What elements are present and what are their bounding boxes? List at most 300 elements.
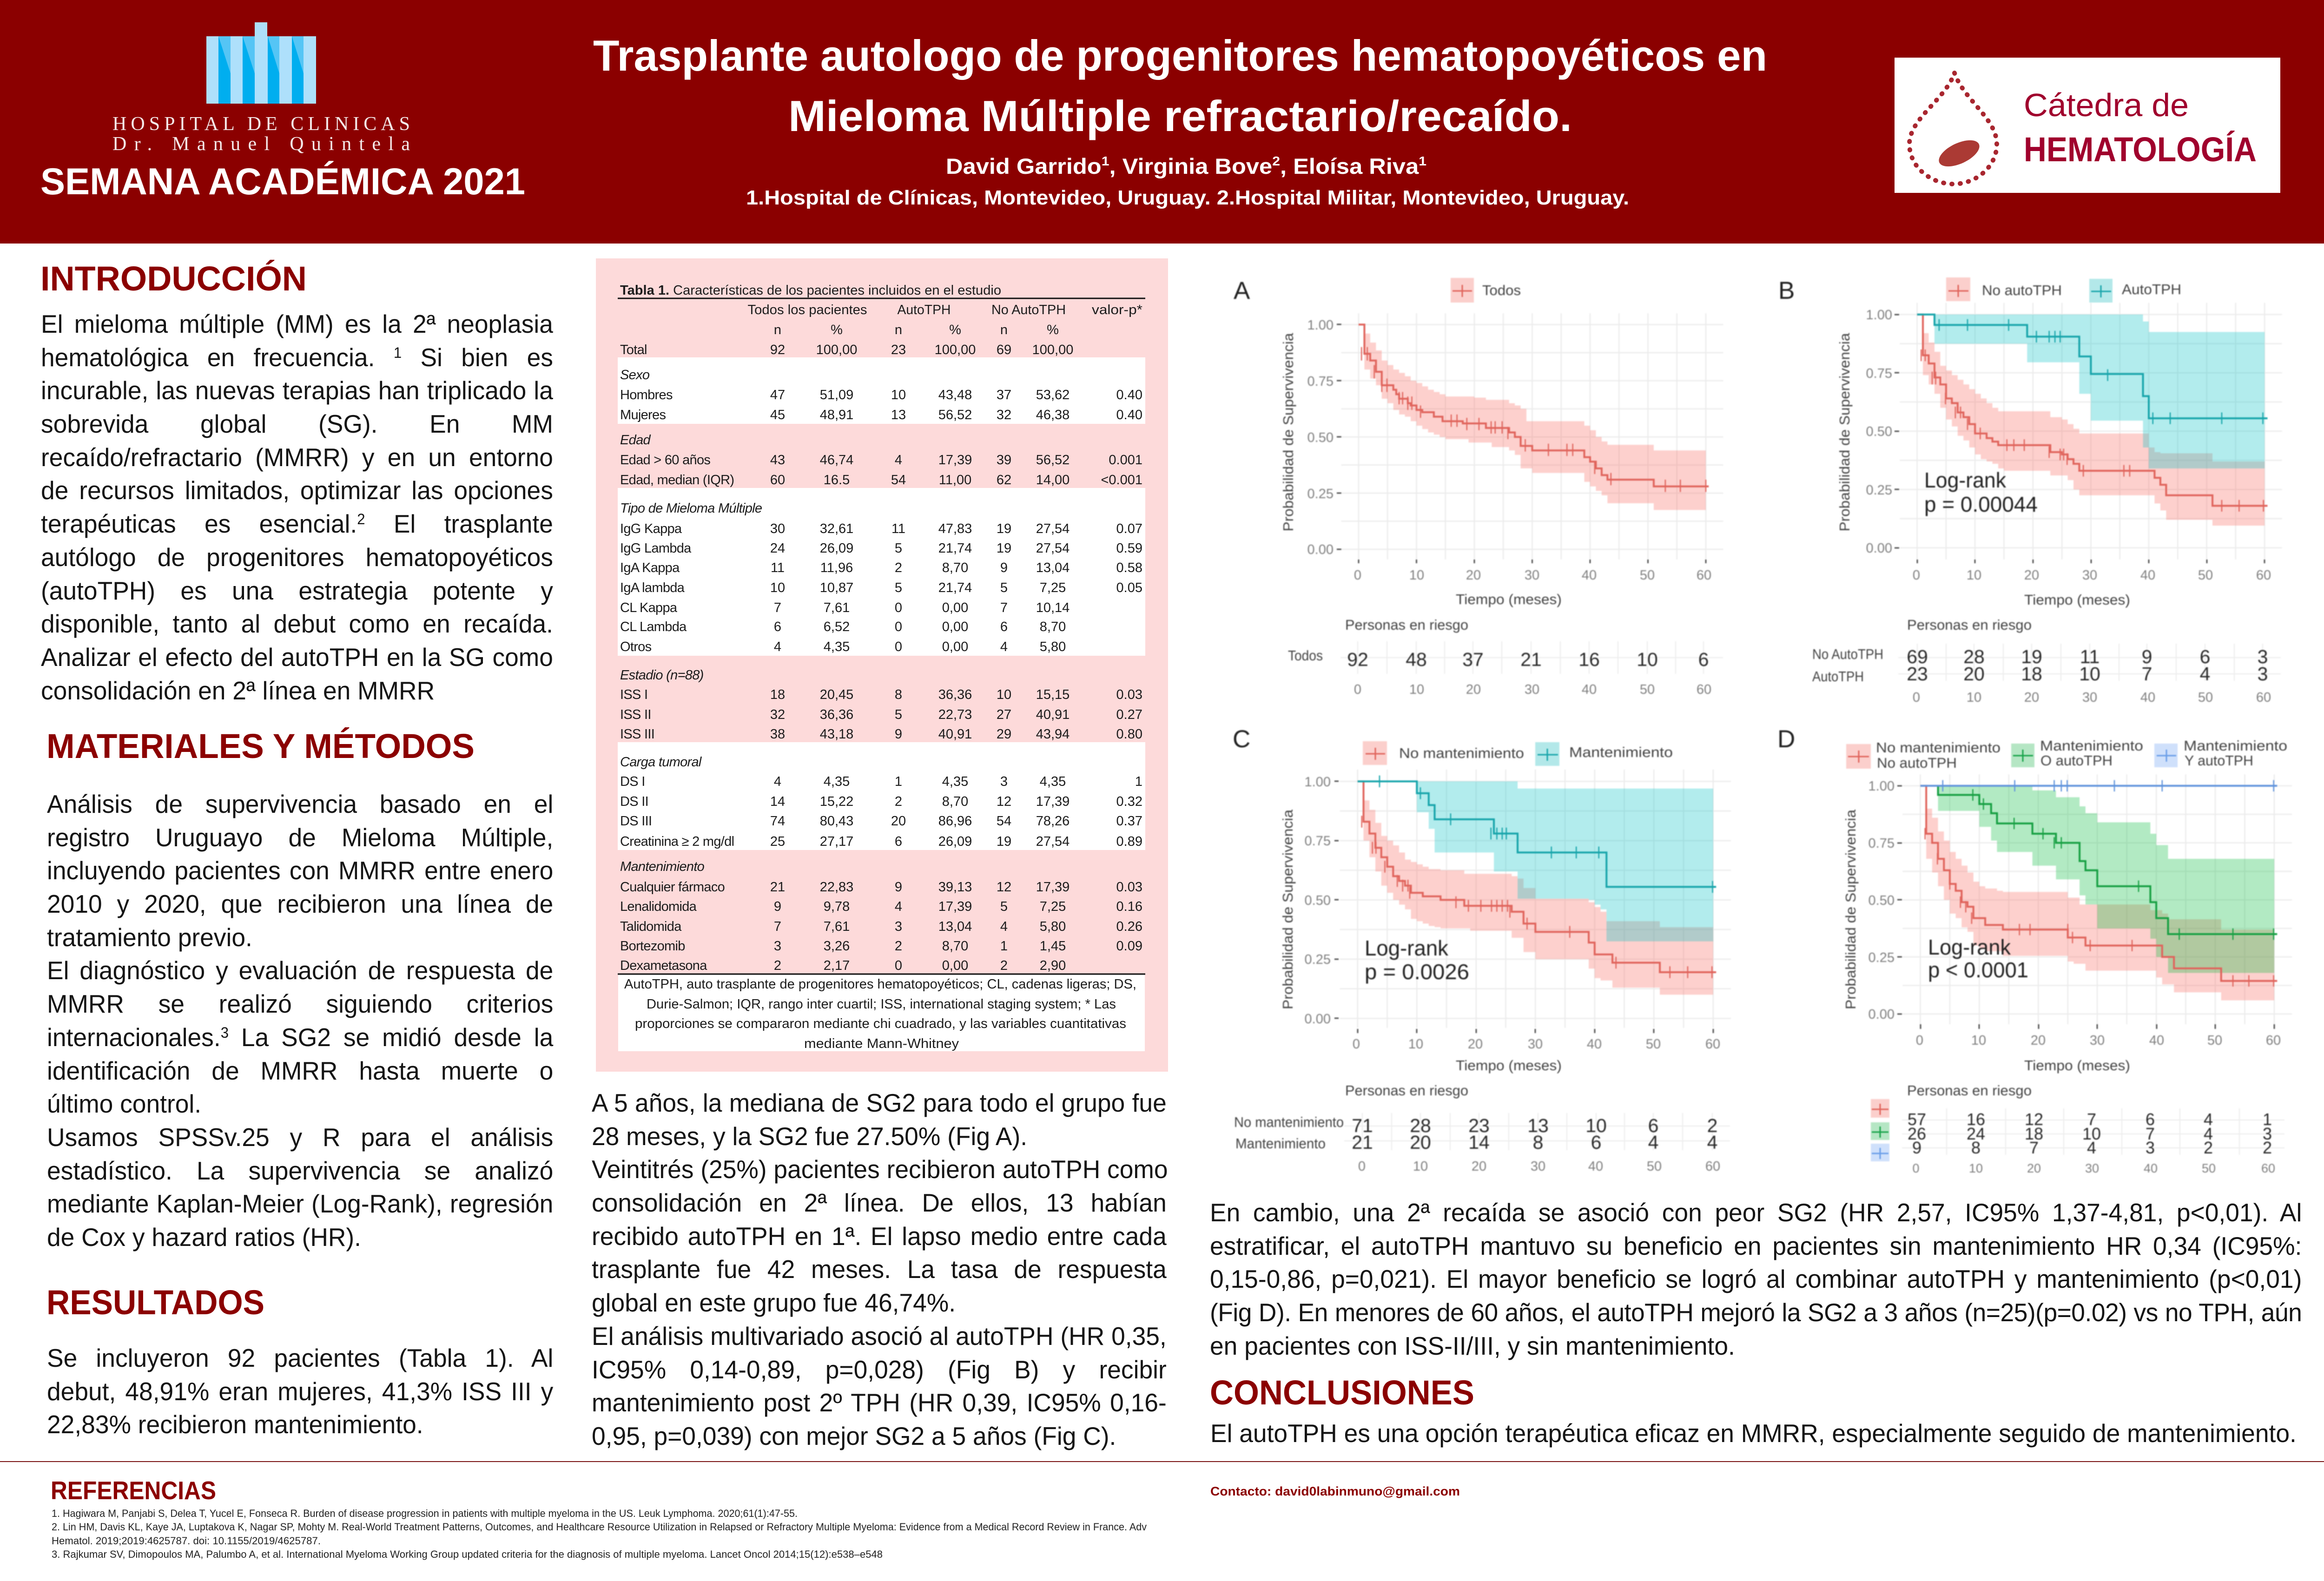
heading: Materiales y métodos: MATERIALES Y MÉTODOS — [46, 727, 475, 764]
table section: Mantenimiento: 0.16 — [1116, 899, 1142, 914]
references list: 1. Hagiwara M, Panjabi S, Delea T, Yucel E, Fonseca R. Burden of disease progression in patients with multiple myeloma in the US. Leuk Lymphoma. 2020;61(1):47-55. — [52, 1508, 798, 1519]
x axis: 60 — [1705, 1037, 1720, 1052]
x axis: 60 — [1697, 568, 1711, 583]
x axis: 50 — [1646, 1037, 1661, 1052]
y axis: 0.25 — [1307, 487, 1334, 501]
survival plot — [1902, 774, 2292, 1024]
table section: Carga tumoral: 6 — [895, 834, 902, 849]
table column headers: 92 — [770, 343, 785, 357]
table section: Estadio: 5 — [895, 707, 902, 722]
table section: Mantenimiento: 8,70 — [942, 939, 968, 954]
risk table: 40 — [2144, 1161, 2158, 1175]
risk table: 71 — [1352, 1115, 1373, 1136]
table section: Tipo de Mieloma Múltiple: 2 — [895, 560, 902, 575]
table section: Carga tumoral: 19 — [997, 834, 1011, 849]
text block: resultados — [47, 1342, 553, 1442]
text block: materiales y métodos: incluyendo pacientes con MMRR entre enero — [47, 856, 553, 885]
table section: Mantenimiento: Lenalidomida — [620, 899, 697, 914]
table section: Carga tumoral: 4,35 — [824, 774, 850, 789]
y axis: 0.25 — [1305, 952, 1331, 967]
panel letter B: B — [1778, 277, 1795, 304]
risk table — [1812, 617, 2281, 705]
table section: Carga tumoral: 3 — [1000, 774, 1008, 789]
table section: Tipo de Mieloma Múltiple: 10,14 — [1036, 600, 1070, 615]
x axis: 30 — [2082, 568, 2097, 583]
table section: Edad: 4 — [895, 453, 902, 468]
risk table: 8 — [1533, 1132, 1543, 1153]
legend: No mantenimiento — [1876, 739, 2000, 756]
table section: Tipo de Mieloma Múltiple: 30 — [770, 521, 785, 536]
x axis: 20 — [1468, 1037, 1483, 1052]
table section: Tipo de Mieloma Múltiple — [620, 501, 1142, 654]
risk table: 18 — [2025, 1124, 2043, 1143]
table section: Mantenimiento: 21 — [770, 880, 785, 895]
table section: Tipo de Mieloma Múltiple: 4,35 — [824, 639, 850, 654]
table footnote: proporciones se compararon mediante chi cuadrado, y las variables cuantitativas — [635, 1016, 1126, 1031]
table section: Carga tumoral: 80,43 — [820, 814, 853, 829]
table section: Sexo: 32 — [997, 408, 1011, 422]
table section: Estadio: 36,36 — [938, 687, 972, 702]
text block: introducción: disponible, tanto al debut como en recaída. — [41, 609, 553, 638]
table section: Tipo de Mieloma Múltiple: 19 — [997, 521, 1011, 536]
table section: Sexo: 56,52 — [938, 408, 972, 422]
log-rank annotation — [1365, 936, 1469, 984]
risk table: 10 — [1409, 682, 1424, 697]
x axis: Tiempo (meses) — [1456, 1057, 1562, 1074]
panel letter D: D — [1777, 725, 1795, 753]
table footnote: Durie-Salmon; IQR, rango inter cuartil; ISS, international staging system; * Las — [647, 997, 1116, 1012]
y axis — [1836, 308, 1899, 556]
table section: Tipo de Mieloma Múltiple: 4 — [1000, 639, 1008, 654]
table section: Estadio: 22,73 — [938, 707, 972, 722]
risk table: 23 — [1468, 1115, 1490, 1136]
text block: resultados continuación: recibido autoTPH en 1ª. El lapso medio entre cada — [592, 1222, 1167, 1251]
table section: Sexo: Hombres — [620, 388, 673, 402]
table column headers: 100,00 — [1032, 343, 1073, 357]
y axis: 0.50 — [1307, 430, 1334, 445]
table section: Sexo: 48,91 — [820, 408, 853, 422]
legend: No autoTPH — [1877, 755, 1957, 771]
affiliations: 1.Hospital de Clínicas, Montevideo, Uruguay. 2.Hospital Militar, Montevideo, Uruguay. — [746, 186, 1629, 209]
table section: Tipo de Mieloma Múltiple: 11,96 — [820, 560, 853, 575]
table section: Estadio: 29 — [997, 727, 1011, 742]
table section: Tipo de Mieloma Múltiple: 47,83 — [938, 521, 972, 536]
table section: Sexo: Sexo — [620, 368, 650, 382]
table section: Sexo: 46,38 — [1036, 408, 1070, 422]
table section: Tipo de Mieloma Múltiple: 6 — [1000, 619, 1008, 634]
table section: Mantenimiento: 2 — [895, 939, 902, 954]
table section: Tipo de Mieloma Múltiple: 0.07 — [1116, 521, 1142, 536]
risk table: 10 — [1967, 690, 1981, 705]
table section: Tipo de Mieloma Múltiple: 0 — [895, 619, 902, 634]
risk table: 50 — [1640, 682, 1655, 697]
legend: Y autoTPH — [2185, 752, 2253, 769]
hospital name — [112, 113, 410, 155]
x axis: Tiempo (meses) — [2024, 592, 2130, 608]
text block: resultados continuación — [592, 1087, 1167, 1453]
table section: Carga tumoral: 2 — [895, 794, 902, 809]
chart D: combinación mantenimiento y autoTPH — [1776, 725, 2324, 1190]
table section: Mantenimiento: 0.09 — [1116, 939, 1142, 954]
text block: conclusiones: El autoTPH es una opción terapéutica eficaz en MMRR, especialmente seguido de mantenimiento. — [1210, 1419, 2297, 1448]
x axis: 10 — [1971, 1033, 1986, 1048]
text block: resultados continuación: 28 meses, y la SG2 fue 27.50% (Fig A). — [592, 1122, 1027, 1151]
risk table: 1 — [2263, 1110, 2272, 1129]
risk table: No AutoTPH — [1812, 646, 1883, 662]
text block: materiales y métodos: de Cox y hazard ratios (HR). — [47, 1223, 361, 1252]
text block: introducción: terapéuticas es esencial.2 El trasplante — [41, 509, 553, 538]
risk table: AutoTPH — [1812, 668, 1864, 685]
logo panel: Cátedra de Hematología — [1895, 58, 2280, 193]
logo text — [2024, 87, 2257, 169]
table section: Mantenimiento: Mantenimiento — [620, 859, 705, 874]
y axis: 0.25 — [1866, 483, 1892, 498]
text block: materiales y métodos: MMRR se realizó siguiendo criterios — [47, 989, 553, 1018]
text block: resultados: Se incluyeron 92 pacientes (Tabla 1). Al — [47, 1344, 553, 1372]
table section: Mantenimiento: 3 — [895, 919, 902, 934]
risk table: 0 — [1354, 682, 1361, 697]
table section: Carga tumoral: 1 — [895, 774, 902, 789]
x axis: 50 — [1640, 568, 1655, 583]
table section: Edad: 43 — [770, 453, 785, 468]
risk table: 50 — [1647, 1159, 1662, 1174]
authors: David Garrido — [946, 154, 1090, 178]
table section: Tipo de Mieloma Múltiple: 8,70 — [942, 560, 968, 575]
x axis — [1354, 560, 1711, 607]
chart A: supervivencia global — [1218, 260, 1776, 725]
text block: introducción: (autoTPH) es una estrategia potente y — [41, 576, 553, 605]
table section: Tipo de Mieloma Múltiple: 0 — [895, 639, 902, 654]
log-rank annotation — [1928, 935, 2028, 982]
text block: introducción: consolidación en 2ª línea en MMRR — [41, 676, 435, 705]
table column headers: n — [895, 323, 902, 337]
table section: Tipo de Mieloma Múltiple: 0.05 — [1116, 580, 1142, 595]
references list — [49, 1506, 1155, 1564]
table section: Tipo de Mieloma Múltiple: Tipo de Mieloma Múltiple — [620, 501, 762, 516]
text block: materiales y métodos: 2010 y 2020, que recibieron una línea de — [47, 889, 553, 918]
risk table: Personas en riesgo — [1345, 617, 1468, 633]
table section: Mantenimiento: 1 — [1000, 939, 1008, 954]
x axis: 40 — [2149, 1033, 2164, 1048]
legend: O autoTPH — [2040, 752, 2113, 769]
log-rank annotation: Log-rank — [1928, 935, 2011, 959]
table section: Sexo: 47 — [770, 388, 785, 402]
risk table: Personas en riesgo — [1907, 617, 2032, 633]
risk table: 60 — [2256, 690, 2271, 705]
text block: introducción — [41, 308, 553, 707]
table section: Carga tumoral: 27,54 — [1036, 834, 1070, 849]
risk table: 3 — [2146, 1138, 2155, 1157]
y axis: 1.00 — [1866, 308, 1892, 323]
table column headers: 69 — [997, 343, 1011, 357]
table section: Tipo de Mieloma Múltiple: 0,00 — [942, 639, 968, 654]
risk table: 10 — [1969, 1161, 1983, 1175]
risk table: 30 — [2085, 1161, 2099, 1175]
risk table: 7 — [2146, 1124, 2155, 1143]
risk table: 0 — [1358, 1159, 1366, 1174]
table section: Mantenimiento: 7,61 — [824, 919, 850, 934]
log-rank annotation: p < 0.0001 — [1928, 958, 2028, 982]
risk table: 6 — [1698, 649, 1709, 670]
text block: resultados continuación: mantenimiento post 2º TPH (HR 0,39, IC95% 0,16- — [592, 1388, 1167, 1417]
table section: Tipo de Mieloma Múltiple: 7,61 — [824, 600, 850, 615]
hospital name: HOSPITAL DE CLINICAS — [112, 113, 410, 135]
x axis: 40 — [1582, 568, 1597, 583]
table section: Tipo de Mieloma Múltiple: IgG Lambda — [620, 541, 692, 556]
x axis: Tiempo (meses) — [1456, 591, 1562, 607]
table section: Mantenimiento: 9 — [895, 880, 902, 895]
risk table: 7 — [2142, 663, 2152, 685]
panel letter A: A — [1234, 277, 1250, 304]
references list: Hematol. 2019;2019:4625787. doi: 10.1155/2019/4625787. — [52, 1535, 321, 1547]
table section: Estadio: 40,91 — [1036, 707, 1070, 722]
risk table: 21 — [1352, 1132, 1373, 1153]
text block: materiales y métodos: último control. — [47, 1089, 201, 1118]
legend: No mantenimiento — [1399, 745, 1524, 761]
x axis: 60 — [2256, 568, 2271, 583]
risk table: 4 — [2204, 1124, 2213, 1143]
x axis — [1353, 1029, 1720, 1074]
risk table: 3 — [2258, 646, 2268, 667]
x axis: 40 — [2140, 568, 2155, 583]
text block: materiales y métodos: Usamos SPSSv.25 y R para el análisis — [47, 1123, 553, 1152]
table section: Mantenimiento — [620, 859, 1142, 973]
table column headers: No AutoTPH — [991, 303, 1066, 317]
table section: Estadio: ISS II — [620, 707, 651, 722]
table column headers: 23 — [891, 343, 906, 357]
table section: Tipo de Mieloma Múltiple: 24 — [770, 541, 785, 556]
table section: Estadio: 0.80 — [1116, 727, 1142, 742]
risk table: 92 — [1347, 649, 1368, 670]
risk table: 20 — [1472, 1159, 1486, 1174]
text block: materiales y métodos: Análisis de supervivencia basado en el — [47, 790, 553, 818]
x axis: 10 — [1408, 1037, 1423, 1052]
table section: Estadio: Estadio (n=88) — [620, 668, 704, 683]
table section: Sexo: 0.40 — [1116, 388, 1142, 402]
table section: Mantenimiento: 1,45 — [1040, 939, 1066, 954]
chart B: autoTPH vs no autoTPH — [1776, 260, 2324, 725]
risk table: 9 — [1912, 1138, 1921, 1157]
y axis: 0.50 — [1866, 424, 1892, 439]
x axis: 20 — [2031, 1033, 2046, 1048]
risk table: 2 — [2204, 1138, 2213, 1157]
table section: Carga tumoral: 4,35 — [1040, 774, 1066, 789]
risk table: Personas en riesgo — [1907, 1082, 2032, 1099]
risk table: 4 — [1707, 1132, 1717, 1153]
x axis: 0 — [1354, 568, 1361, 583]
risk table: 14 — [1468, 1132, 1490, 1153]
risk table: 28 — [1410, 1115, 1431, 1136]
y axis: Probabilidad de Supervivencia — [1280, 809, 1296, 1009]
table column headers: % — [1047, 323, 1059, 337]
text block: estratificación: En cambio, una 2ª recaída se asoció con peor SG2 (HR 2,57, IC95% 1,37-4,81, p<0,01). Al — [1210, 1198, 2302, 1227]
risk table: 16 — [1578, 649, 1600, 670]
text block: estratificación: estratificar, el autoTPH mantuvo su beneficio en pacientes sin mantenimiento HR 0,34 (IC95%: — [1210, 1232, 2302, 1260]
y axis: 0.50 — [1868, 893, 1895, 908]
contact: Contacto: david0labinmuno@gmail.com — [1210, 1484, 1460, 1498]
table section: Carga tumoral: 15,22 — [820, 794, 853, 809]
text block: estratificación: (Fig D). En menores de 60 años, el autoTPH mejoró la SG2 a 3 años (n=25)(p=0.02) vs no TPH, aún — [1210, 1298, 2302, 1327]
risk table: 20 — [2024, 690, 2039, 705]
table section: Edad: Edad — [620, 433, 651, 448]
x axis: 50 — [2198, 568, 2213, 583]
table section: Mantenimiento: 9,78 — [824, 899, 850, 914]
table section: Carga tumoral: 1 — [1135, 774, 1142, 789]
risk table: Todos — [1288, 647, 1323, 664]
y axis: Probabilidad de Supervivencia — [1842, 809, 1859, 1009]
text block: introducción: El mieloma múltiple (MM) es la 2ª neoplasia — [41, 310, 553, 338]
log-rank annotation — [1924, 468, 2038, 516]
table section: Estadio: 0.03 — [1116, 687, 1142, 702]
table section: Mantenimiento: 2 — [774, 958, 781, 973]
heading: Introducción: INTRODUCCIÓN — [40, 259, 307, 297]
log-rank annotation: Log-rank — [1924, 468, 2007, 492]
table section: Carga tumoral — [620, 755, 1142, 849]
text block: resultados: 22,83% recibieron mantenimiento. — [47, 1410, 423, 1439]
table column headers: 100,00 — [935, 343, 976, 357]
table section: Estadio: 43,18 — [820, 727, 853, 742]
y axis: 0.00 — [1866, 541, 1892, 556]
table section: Carga tumoral: 27,17 — [820, 834, 853, 849]
table section: Carga tumoral: Carga tumoral — [620, 755, 702, 770]
table section: Mantenimiento: 7,25 — [1040, 899, 1066, 914]
x axis: 0 — [1353, 1037, 1360, 1052]
text block: resultados continuación: consolidación en 2ª línea. De ellos, 13 habían — [592, 1188, 1167, 1217]
risk table: 13 — [1527, 1115, 1549, 1136]
y axis — [1842, 779, 1902, 1022]
table section: Mantenimiento: 0.03 — [1116, 880, 1142, 895]
table section: Tipo de Mieloma Múltiple: 32,61 — [820, 521, 853, 536]
survival plot — [1900, 303, 2282, 560]
table section: Mantenimiento: 17,39 — [938, 899, 972, 914]
table section: Edad — [620, 433, 1142, 487]
table section: Carga tumoral: DS II — [620, 794, 648, 809]
footer divider — [0, 1461, 2324, 1462]
y axis — [1280, 775, 1339, 1027]
risk table — [1288, 617, 1723, 697]
risk table: 10 — [1413, 1159, 1428, 1174]
table section: Carga tumoral: 74 — [770, 814, 785, 829]
y axis: 0.25 — [1868, 950, 1895, 965]
risk table — [1234, 1082, 1730, 1174]
y axis: 0.00 — [1868, 1007, 1895, 1022]
table section: Carga tumoral: 4,35 — [942, 774, 968, 789]
risk table: 4 — [1648, 1132, 1658, 1153]
table section: Carga tumoral: 14 — [770, 794, 785, 809]
table section: Edad: 14,00 — [1036, 473, 1070, 487]
y axis: 1.00 — [1305, 775, 1331, 790]
log-rank annotation: p = 0.00044 — [1924, 492, 2038, 516]
table section: Tipo de Mieloma Múltiple: 13,04 — [1036, 560, 1070, 575]
table section: Sexo: 53,62 — [1036, 388, 1070, 402]
risk table: 40 — [2140, 690, 2155, 705]
table section: Carga tumoral: 8,70 — [942, 794, 968, 809]
text block: introducción: incurable, las nuevas terapias han triplicado la — [41, 376, 553, 405]
table section: Edad: 16.5 — [824, 473, 850, 487]
authors: , Virginia Bove — [1109, 154, 1272, 178]
y axis: 0.75 — [1868, 836, 1895, 851]
x axis: 30 — [2090, 1033, 2105, 1048]
risk table: 0 — [1913, 690, 1920, 705]
legend: Mantenimiento — [2184, 738, 2287, 754]
text block: resultados continuación: trasplante fue 42 meses. La tasa de respuesta — [592, 1255, 1167, 1284]
title: Trasplante autologo de progenitores hematopoyéticos en — [593, 31, 1767, 80]
table section: Tipo de Mieloma Múltiple: IgA Kappa — [620, 560, 680, 575]
table section: Estadio: 18 — [770, 687, 785, 702]
table section: Estadio: 8 — [895, 687, 902, 702]
table section: Edad: 54 — [891, 473, 906, 487]
table section: Tipo de Mieloma Múltiple: Otros — [620, 639, 652, 654]
x axis: 0 — [1913, 568, 1920, 583]
table section: Mantenimiento: 4 — [895, 899, 902, 914]
y axis: Probabilidad de Supervivencia — [1836, 333, 1853, 532]
references list: 2. Lin HM, Davis KL, Kaye JA, Luptakova K, Nagar SP, Mohty M. Real-World Treatment Patterns, Outcomes, and Healthcare Resource Utilization in Relapsed or Refractory Multiple Myeloma: Evidence from a Medical Record Review in France. Adv — [52, 1521, 1147, 1533]
table section: Sexo: 13 — [891, 408, 906, 422]
table section: Mantenimiento: Talidomida — [620, 919, 682, 934]
logo text: HEMATOLOGÍA — [2024, 130, 2257, 169]
table section: Mantenimiento: 0.26 — [1116, 919, 1142, 934]
text block: resultados continuación: global en este grupo fue 46,74%. — [592, 1288, 956, 1317]
risk table: 20 — [1963, 663, 1985, 685]
table section: Tipo de Mieloma Múltiple: 19 — [997, 541, 1011, 556]
table column headers: n — [1000, 323, 1008, 337]
table section: Tipo de Mieloma Múltiple: 26,09 — [820, 541, 853, 556]
table section: Mantenimiento: 39,13 — [938, 880, 972, 895]
table section: Mantenimiento: 12 — [997, 880, 1011, 895]
table section: Tipo de Mieloma Múltiple: CL Kappa — [620, 600, 678, 615]
table section: Sexo: 43,48 — [938, 388, 972, 402]
table section: Edad: 17,39 — [938, 453, 972, 468]
risk table: 11 — [2080, 646, 2100, 667]
risk table: 19 — [2021, 646, 2042, 667]
table footnote: mediante Mann-Whitney — [804, 1036, 959, 1051]
table section: Tipo de Mieloma Múltiple: 0 — [895, 600, 902, 615]
risk table: 50 — [2198, 690, 2213, 705]
risk table: 2 — [2263, 1138, 2272, 1157]
table section: Tipo de Mieloma Múltiple: 7 — [774, 600, 781, 615]
table column headers: 100,00 — [816, 343, 857, 357]
table section: Tipo de Mieloma Múltiple: 0.59 — [1116, 541, 1142, 556]
y axis — [1280, 318, 1341, 557]
log-rank annotation: p = 0.0026 — [1365, 960, 1469, 984]
x axis — [1913, 560, 2271, 608]
text block: resultados continuación: A 5 años, la mediana de SG2 para todo el grupo fue — [592, 1088, 1167, 1117]
table section: Estadio: 32 — [770, 707, 785, 722]
risk table: 40 — [1582, 682, 1597, 697]
risk table: 26 — [1908, 1124, 1926, 1143]
y axis: 0.50 — [1305, 893, 1331, 908]
y axis: 1.00 — [1307, 318, 1334, 333]
table section: Mantenimiento: 5,80 — [1040, 919, 1066, 934]
table section: Sexo: Mujeres — [620, 408, 666, 422]
legend: Mantenimiento — [2040, 738, 2143, 754]
risk table — [1871, 1082, 2284, 1175]
table section: Mantenimiento: Cualquier fármaco — [620, 880, 725, 895]
table column headers: Total — [620, 343, 647, 357]
text block: resultados continuación: El análisis multivariado asoció al autoTPH (HR 0,35, — [592, 1322, 1167, 1350]
legend — [1363, 741, 1673, 766]
table section: Carga tumoral: DS I — [620, 774, 645, 789]
table section: Tipo de Mieloma Múltiple: 8,70 — [1040, 619, 1066, 634]
table footnote: AutoTPH, auto trasplante de progenitores hematopoyéticos; CL, cadenas ligeras; DS, — [624, 977, 1136, 992]
table section: Mantenimiento: 3 — [774, 939, 781, 954]
text block: materiales y métodos: mediante Kaplan-Meier (Log-Rank), regresión — [47, 1189, 553, 1218]
table section: Carga tumoral: DS III — [620, 814, 652, 829]
table section: Edad: 0.001 — [1109, 453, 1142, 468]
risk table: 18 — [2021, 663, 2042, 685]
x axis: 60 — [2266, 1033, 2281, 1048]
y axis: 0.00 — [1307, 542, 1334, 557]
